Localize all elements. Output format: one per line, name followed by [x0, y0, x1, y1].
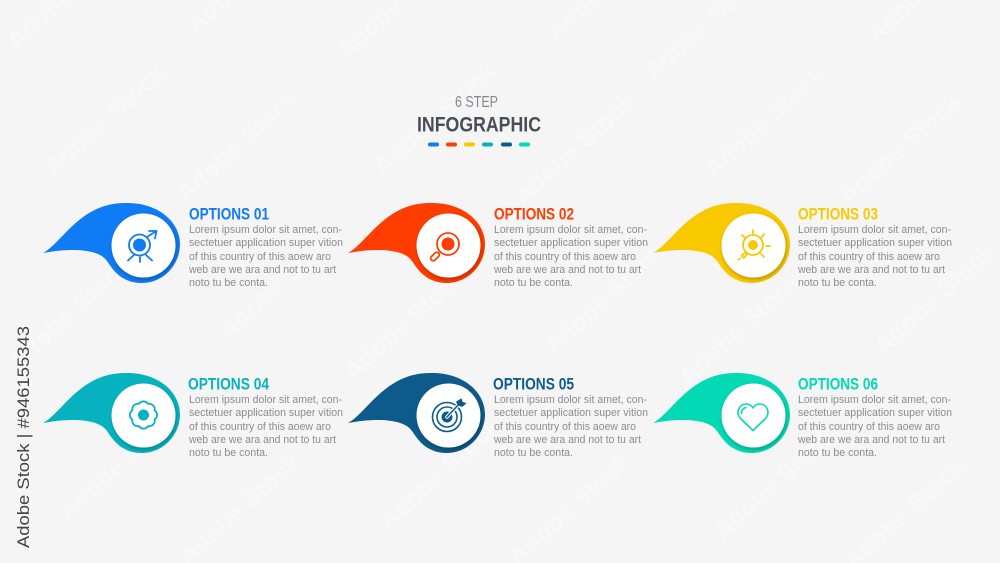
stock watermark overlay: Adobe Stock: [214, 222, 346, 346]
description: of this country of this aoew aro: [189, 251, 331, 263]
description: Lorem ipsum dolor sit amet, con-: [798, 224, 951, 236]
step 1 panel: [43, 203, 343, 289]
heading: infographic: INFOGRAPHIC: [417, 114, 541, 136]
option title: OPTIONS 06: [798, 374, 878, 394]
white circle: [722, 384, 786, 448]
description: noto tu be conta.: [494, 277, 573, 289]
subtitle: 6 step: 6 STEP: [455, 94, 498, 111]
description: sectetuer application super vition: [494, 407, 648, 419]
description: of this country of this aoew aro: [494, 421, 636, 433]
white circle: [416, 214, 480, 278]
description: web are we ara and not to tu art: [493, 264, 641, 276]
stock watermark overlay: Adobe Stock: [674, 267, 806, 391]
stock watermark overlay: Adobe Stock: [869, 237, 1000, 361]
step 2 panel: [348, 203, 648, 289]
description: of this country of this aoew aro: [798, 421, 940, 433]
description: [797, 394, 952, 459]
step 4 panel: [43, 373, 343, 459]
description: sectetuer application super vition: [798, 407, 952, 419]
description: Lorem ipsum dolor sit amet, con-: [798, 394, 951, 406]
stock watermark overlay: Adobe Stock: [539, 237, 671, 361]
option title: OPTIONS 02: [494, 204, 574, 224]
teardrop shape: [43, 373, 180, 453]
teardrop shape: [653, 203, 790, 283]
stock watermark overlay: Adobe Stock: [172, 84, 304, 208]
teardrop shape: [348, 373, 485, 453]
description: Lorem ipsum dolor sit amet, con-: [494, 394, 647, 406]
description: noto tu be conta.: [189, 277, 268, 289]
description: [797, 224, 952, 289]
description: noto tu be conta.: [798, 277, 877, 289]
description: Lorem ipsum dolor sit amet, con-: [189, 224, 342, 236]
stock watermark overlay: Adobe Stock: [834, 87, 966, 211]
description: Lorem ipsum dolor sit amet, con-: [189, 394, 342, 406]
colour dashes: [428, 142, 530, 146]
stock watermark overlay: Adobe Stock: [39, 58, 171, 182]
icon: gear: [130, 401, 157, 429]
description: of this country of this aoew aro: [798, 251, 940, 263]
description: web are we ara and not to tu art: [797, 264, 945, 276]
stock watermark overlay: Adobe Stock: [339, 262, 471, 386]
icon: heart: [738, 404, 768, 430]
stock watermark overlay: Adobe Stock: [54, 402, 186, 526]
stock watermark overlay: Adobe Stock: [699, 60, 831, 184]
icon: target with arrow: [432, 400, 465, 432]
description: of this country of this aoew aro: [494, 251, 636, 263]
description: web are we ara and not to tu art: [493, 434, 641, 446]
description: Lorem ipsum dolor sit amet, con-: [494, 224, 647, 236]
white circle: [112, 214, 176, 278]
description: [493, 224, 648, 289]
option title: OPTIONS 04: [188, 374, 269, 394]
description: noto tu be conta.: [189, 447, 268, 459]
option title: OPTIONS 01: [189, 204, 269, 224]
description: sectetuer application super vition: [494, 237, 648, 249]
stock watermark overlay: Adobe Stock: [4, 252, 136, 376]
title: [417, 94, 541, 146]
description: sectetuer application super vition: [798, 237, 952, 249]
step 5 panel: [348, 373, 648, 459]
stock watermark overlay: Adobe Stock: [709, 422, 841, 546]
teardrop shape: [348, 203, 485, 283]
white circle: [722, 214, 786, 278]
step 6 panel: [653, 373, 952, 459]
description: noto tu be conta.: [494, 447, 573, 459]
description: of this country of this aoew aro: [189, 421, 331, 433]
description: [188, 224, 343, 289]
stock watermark overlay: Adobe Stock: [369, 57, 501, 181]
white circle: [112, 384, 176, 448]
icon: gender target: [128, 231, 156, 262]
description: web are we ara and not to tu art: [797, 434, 945, 446]
description: web are we ara and not to tu art: [188, 264, 336, 276]
stock watermark overlay: Adobe Stock: [509, 87, 641, 211]
step 3 panel: [653, 203, 952, 289]
icon: light bulb: [738, 230, 770, 260]
description: sectetuer application super vition: [189, 237, 343, 249]
description: noto tu be conta.: [798, 447, 877, 459]
option title: OPTIONS 03: [798, 204, 878, 224]
description: [188, 394, 343, 459]
teardrop shape: [43, 203, 180, 283]
icon: magnifier: [430, 233, 459, 262]
teardrop shape: [653, 373, 790, 453]
stock id side label: Adobe Stock | #946155343: [14, 326, 33, 548]
stock watermark overlay: Adobe Stock: [374, 412, 506, 536]
description: [493, 394, 648, 459]
option title: OPTIONS 05: [493, 374, 574, 394]
description: web are we ara and not to tu art: [188, 434, 336, 446]
description: sectetuer application super vition: [189, 407, 343, 419]
white circle: [416, 384, 480, 448]
